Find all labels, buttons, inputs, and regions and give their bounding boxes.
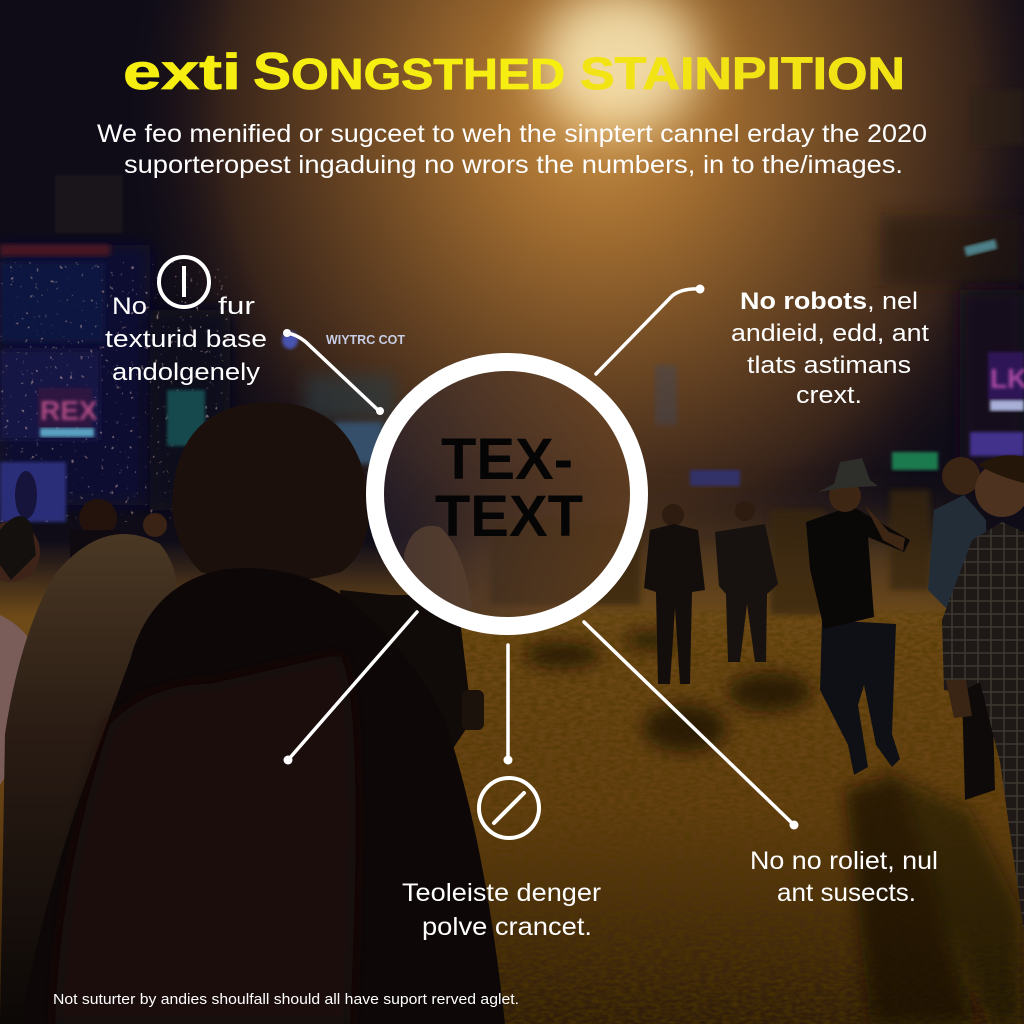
callout: top left: andolgenely [112, 359, 260, 386]
person: behind ring with long hair [340, 526, 484, 780]
left stage screens: REX [40, 395, 98, 426]
callout: top right: andieid, edd, ant [731, 320, 929, 347]
title: STAINPITION [580, 48, 905, 99]
signage text: WIYTRC COT [326, 332, 405, 347]
person: right back [928, 457, 995, 800]
callout: bottom right: No no roliet, nul [750, 847, 938, 875]
grass shadows [524, 631, 1020, 1024]
person: suit right [715, 501, 778, 662]
callout: top left: fur [218, 293, 255, 320]
ring [375, 362, 639, 626]
callout: bottom right [750, 847, 938, 907]
intro text: suporteropest ingaduing no wrors the numbers, in to the/images. [124, 151, 903, 179]
left stage screens [0, 175, 230, 522]
callout: bottom right: ant susects. [777, 879, 916, 907]
footnote: Not suturter by andies shoulfall should all have suport rerved aglet. [53, 992, 519, 1008]
callout: bottom center [402, 879, 601, 941]
foreground person [20, 402, 505, 1024]
title [123, 43, 905, 101]
callout: top left [105, 293, 267, 386]
callout: top right: tlats astimans [747, 352, 911, 379]
callout: top right [731, 288, 929, 409]
title: SONGSTHED [253, 43, 565, 101]
crowd silhouettes [0, 402, 1024, 1024]
icon: top left circle [159, 257, 209, 307]
icon: bottom no sign [479, 778, 539, 838]
person: hat [806, 458, 910, 775]
callout: top left: texturid base [105, 326, 267, 353]
person: right plaid [942, 455, 1024, 932]
intro text: We feo menified or sugceet to weh the sinptert cannel erday the 2020 [97, 120, 927, 148]
center label: TEX- [441, 427, 573, 492]
callout: bottom center: polve crancet. [422, 913, 592, 941]
title: exti [123, 44, 241, 100]
person: suit left [644, 504, 705, 684]
center label [435, 427, 583, 549]
connector end dots [283, 284, 798, 830]
left crowd [0, 499, 176, 1024]
callout: top left: No [112, 293, 147, 320]
hazy background crowd [490, 490, 930, 615]
mid and right signage [282, 90, 1024, 486]
callout: top right: crext. [796, 382, 862, 409]
callout: top right: No robots , nel [740, 288, 918, 315]
center label: TEXT [435, 484, 583, 549]
callout: bottom center: Teoleiste denger [402, 879, 601, 907]
intro text [97, 120, 927, 179]
connector lines [287, 289, 794, 825]
